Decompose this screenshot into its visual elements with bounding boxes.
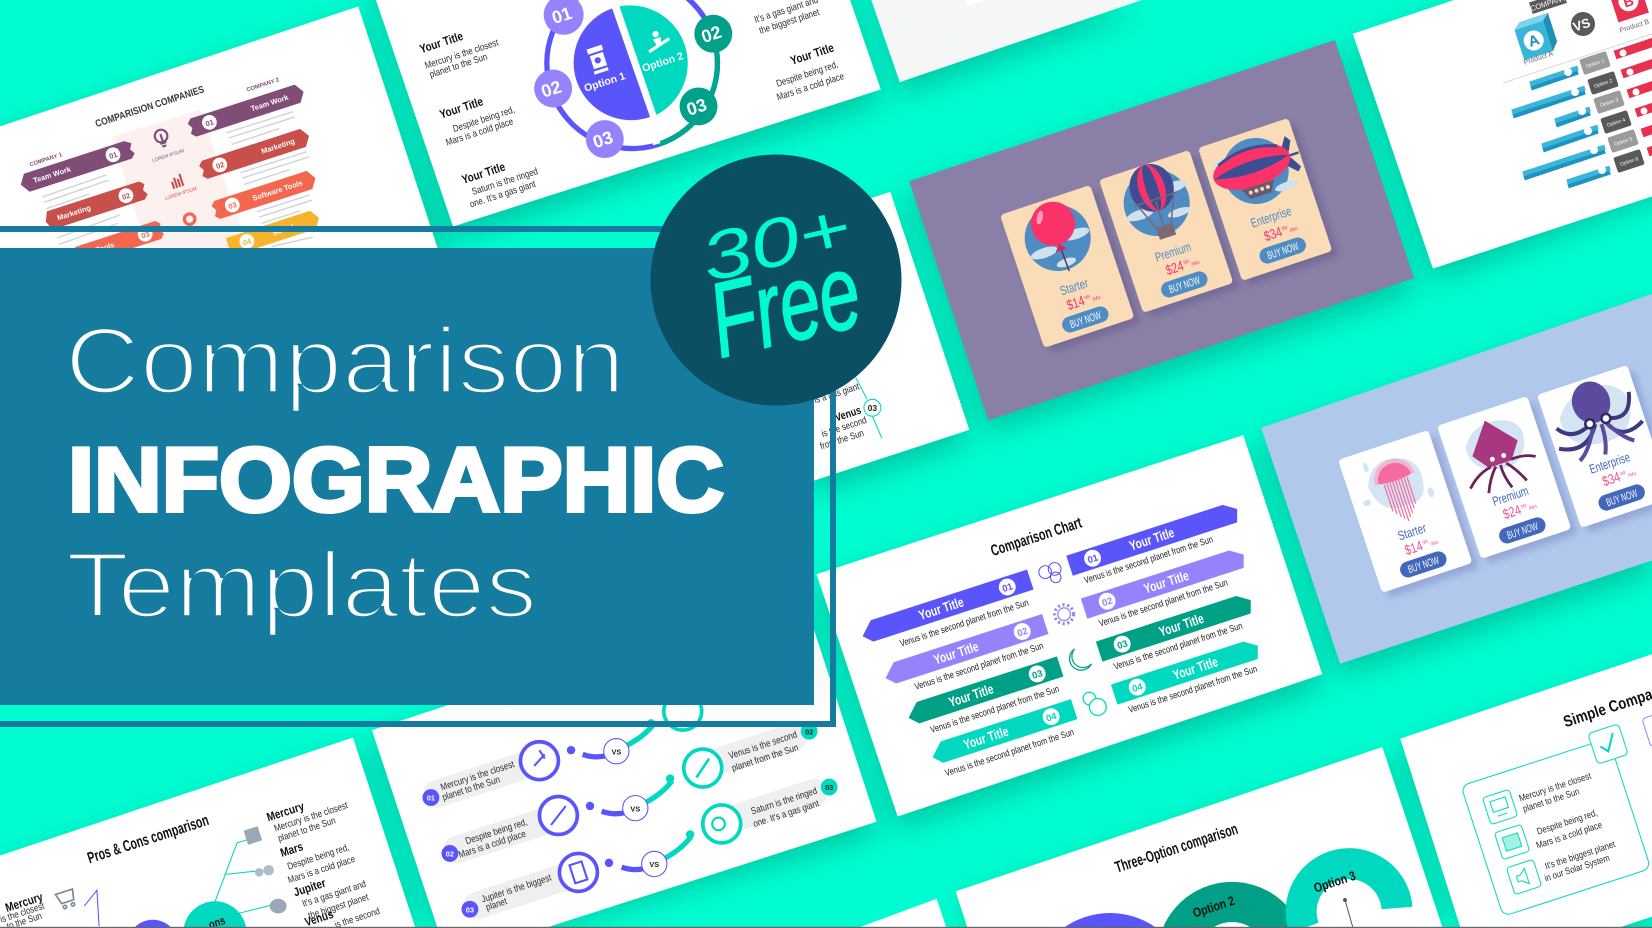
chart: circle diagram: 02 <box>699 22 724 47</box>
icon: sun and cloud <box>1083 692 1106 715</box>
ribbon right 01: Team Work <box>250 92 290 113</box>
row 2: planet from the Sun <box>730 742 800 773</box>
captions: Venus is the second planet from the Sun <box>929 684 1061 736</box>
panel: partly hidden slide: is a gas giant <box>813 380 861 405</box>
card: jellyfish starter: /Mo <box>1430 540 1440 548</box>
panel: pros and cons slide: Mars is a cold place <box>286 853 357 885</box>
ribbon right 01: 01 <box>204 117 215 129</box>
panel: purple pricing slide background <box>909 40 1414 420</box>
option tags: Option 3 <box>1599 97 1619 109</box>
ribbon right 01 <box>186 83 307 138</box>
ribbon left 01: 01 <box>1001 581 1014 595</box>
banner outline <box>0 229 833 724</box>
row 2: Venus is the second <box>727 729 798 761</box>
row 2: Mars is a cold place <box>457 828 527 860</box>
card: hot air balloon premium: $24 <box>1163 257 1186 278</box>
panel: comparison companies slide: LOREM IPSUM <box>164 186 198 202</box>
panel: partly hidden slide: from the Sun <box>819 427 865 452</box>
card: balloon starter: $14 <box>1064 292 1087 313</box>
ribbon right 02 <box>198 127 312 180</box>
card: squid premium: $24 <box>1501 501 1523 522</box>
panel: partly hidden slide: is the second <box>820 414 868 439</box>
ribbon left 02: 02 <box>1016 626 1029 640</box>
card: jellyfish starter: $14 <box>1402 537 1425 558</box>
captions <box>898 534 1259 779</box>
row 3: planet <box>484 895 509 913</box>
panel: blue pricing slide background <box>1261 294 1652 664</box>
panel: two option circle slide: Despite being red, <box>775 59 839 89</box>
panel: two option circle slide: the biggest planet <box>758 6 821 36</box>
panel: partly hidden slide <box>738 192 969 480</box>
ribbon left 02 <box>882 614 1049 686</box>
panel: pros and cons slide: Mars <box>279 840 305 860</box>
row 1: VS <box>611 747 621 756</box>
card: octopus enterprise <box>1537 363 1652 534</box>
option tags: Option 1 <box>1585 58 1605 70</box>
icon: sun <box>1055 605 1074 624</box>
group: simple comparison content: Mercury is the closest <box>1518 770 1593 804</box>
ribbon left 01 <box>859 570 1034 644</box>
card: airship enterprise: 99 <box>1281 225 1288 232</box>
heading: Comparison: Comparison <box>65 308 625 413</box>
banner panel <box>0 248 814 705</box>
chart: three option arches: Three-Option comparison <box>1113 821 1240 877</box>
row 2: 02 <box>446 850 454 859</box>
ribbon right 04: Social <box>271 222 295 237</box>
card: airship enterprise: Enterprise <box>1249 203 1293 231</box>
panel: small bottom slide <box>860 899 946 927</box>
panel: comparison chart slide <box>817 435 1322 817</box>
ribbon right 03: Software Tools <box>251 178 304 203</box>
row 2: 02 <box>805 727 813 736</box>
panel: two option circle slide: planet to the Sun <box>428 51 489 80</box>
ribbon left 02 <box>43 180 149 231</box>
ribbon left 02: 02 <box>121 191 131 202</box>
card: airship enterprise: BUY NOW <box>1266 241 1300 262</box>
panel: two option circle slide: one. It's a gas giant <box>468 178 537 210</box>
option tags: Option 6 <box>1619 156 1639 168</box>
heading: INFOGRAPHIC: INFOGRAPHIC <box>68 430 724 531</box>
panel: comparison companies slide: LOREM IPSUM <box>152 148 185 164</box>
ribbon right 02: Marketing <box>260 136 296 156</box>
option tags <box>1579 51 1645 173</box>
chart: circle diagram: Option 2 <box>641 50 685 75</box>
panel: comparison companies slide: COMPARISION COMPANIES <box>94 84 206 130</box>
frame <box>1461 738 1651 916</box>
icon: picture <box>1494 824 1530 860</box>
ribbon right 01: Your Title <box>1127 525 1176 554</box>
panel: two option circle slide: Your Title <box>438 95 485 122</box>
row 2: VS <box>630 804 640 813</box>
panel: two option circle slide: Your Title <box>418 30 465 56</box>
chart: product B bars <box>1615 40 1652 152</box>
panel: two option circle slide: Mercury is the closest <box>423 37 500 71</box>
ribbon left 02: Marketing <box>56 203 92 222</box>
panel: pros and cons slide: Mercury <box>265 800 307 825</box>
panel: pros and cons slide: Pros & Cons comparison <box>85 812 211 867</box>
icon: drops <box>255 865 274 877</box>
chart: three option arches <box>1063 821 1397 928</box>
panel: top right product comparison slide <box>1353 0 1652 269</box>
ribbon left 02: Your Title <box>932 639 981 668</box>
card: squid premium <box>1437 394 1578 565</box>
row 3: VS <box>649 860 659 869</box>
card: balloon starter: /Mo <box>1092 295 1102 303</box>
ribbon right 02: Your Title <box>1142 568 1191 597</box>
panel: pros and cons slide: Mercury is the closest <box>273 799 350 834</box>
chart: circle diagram: 02 <box>539 77 564 102</box>
chart: three option arches: Option 2 <box>1191 893 1237 921</box>
group: simple comparison content: Despite being red, <box>1535 807 1599 837</box>
group: simple comparison content: in our Solar System <box>1543 852 1611 884</box>
ribbon right 03 <box>210 169 318 220</box>
panel: comparison companies slide <box>0 6 453 316</box>
card: octopus enterprise: $34 <box>1600 468 1622 489</box>
card: jellyfish starter: 99 <box>1422 539 1429 546</box>
panel: two option circle slide: Despite being red, <box>451 104 516 134</box>
chart: product A bars <box>1512 68 1610 186</box>
icon: gear <box>184 214 195 224</box>
group: simple comparison content: planet to the Sun <box>1521 786 1581 814</box>
chart: three option arches: Option 3 <box>1312 868 1358 896</box>
icon: light bulb <box>153 128 170 148</box>
panel: three option slide <box>956 747 1442 927</box>
ribbon right 03: 03 <box>227 200 238 211</box>
card: airship enterprise: $34 <box>1262 223 1284 244</box>
group: top right product comparison content: Product B <box>1619 18 1651 35</box>
badge: 30+ Free <box>650 154 902 406</box>
card: jellyfish starter <box>1338 428 1479 599</box>
panel: pros and cons slide: is the closest <box>0 900 46 925</box>
card: jellyfish starter: BUY NOW <box>1407 554 1441 576</box>
card: octopus enterprise: /Mo <box>1627 471 1637 479</box>
row 1: Mercury is the closest <box>439 758 516 793</box>
row 2: Despite being red, <box>464 816 529 846</box>
icon: database gear <box>270 899 287 913</box>
panel: two option circle slide: Mars is a cold place <box>444 116 515 148</box>
row 1: 01 <box>427 794 435 803</box>
row 1 <box>420 692 702 811</box>
icon: cube A <box>1513 13 1560 60</box>
card: airship enterprise <box>1198 116 1339 287</box>
icon: bar chart <box>170 174 183 189</box>
icon: moon <box>1070 649 1092 670</box>
panel: pros and cons slide: Mercury <box>4 891 45 915</box>
ribbon left 01: Team Work <box>32 164 73 185</box>
panel: two option circle slide: Your Title <box>460 161 507 187</box>
heading: Templates: Templates <box>66 533 537 637</box>
group: simple comparison content: It's the biggest planet <box>1543 838 1617 871</box>
card: hot air balloon premium: Premium <box>1153 239 1193 265</box>
panel: simple comparison slide <box>1400 654 1652 927</box>
ribbon right 04: 04 <box>242 236 253 247</box>
card: balloon starter: BUY NOW <box>1069 309 1103 331</box>
badge: 30+ Free: Free <box>699 232 871 380</box>
row 3: Saturn is the ringed <box>749 785 818 817</box>
panel: comparison chart slide: Comparison Chart <box>989 514 1085 560</box>
chart: circle diagram <box>534 0 732 158</box>
row 3: Jupiter is the biggest <box>480 872 553 905</box>
panel: pros and cons slide: Jupiter <box>292 877 328 900</box>
captions: Venus is the second planet from the Sun <box>1098 577 1229 630</box>
card: airship enterprise: /Mo <box>1289 226 1299 234</box>
captions: Venus is the second planet from the Sun <box>1112 621 1244 673</box>
panel: pill comparison slide <box>372 589 877 927</box>
card: jellyfish starter: Starter <box>1396 520 1429 544</box>
ribbon right 02 <box>1081 547 1248 619</box>
card: hot air balloon premium: BUY NOW <box>1168 274 1202 296</box>
panel: pros and cons slide: planet to the Sun <box>276 815 337 844</box>
card: squid premium: /Mo <box>1528 504 1538 512</box>
group: simple comparison content: Mars is a cold place <box>1535 819 1604 851</box>
card: octopus enterprise: 99 <box>1619 470 1627 478</box>
icon: option 1 machine <box>587 45 610 75</box>
captions: Venus is the second planet from the Sun <box>1127 664 1259 716</box>
ribbon left 03: Tools <box>95 240 116 255</box>
icon: shopping cart <box>55 889 78 910</box>
ribbon left 03: 03 <box>1031 668 1044 682</box>
icon: clouds <box>1039 563 1061 583</box>
ribbon right 04: 04 <box>1131 681 1145 695</box>
ribbon left 04: Your Title <box>962 724 1011 752</box>
row 2 <box>440 720 818 867</box>
icon: device <box>244 826 262 845</box>
captions: Venus is the second planet from the Sun <box>898 597 1030 650</box>
icon: versus badge: VS <box>1571 15 1592 35</box>
icon: cube A: A <box>1526 31 1542 51</box>
ribbon right 04 <box>1111 638 1262 705</box>
ribbon right 02: 02 <box>1101 595 1114 609</box>
captions: Venus is the second planet from the Sun <box>1083 534 1215 586</box>
group: top right product comparison content: Product A <box>1523 50 1554 67</box>
captions: Venus is the second planet from the Sun <box>944 727 1075 779</box>
panel: comparison companies slide: COMPANY 1 <box>29 152 64 168</box>
ribbon left 04: 04 <box>1045 711 1059 725</box>
row 3: 03 <box>825 783 833 792</box>
card: balloon starter: Starter <box>1058 275 1091 299</box>
ribbon left 01: 01 <box>108 150 118 161</box>
card: balloon starter: 99 <box>1084 294 1091 301</box>
card: squid premium: BUY NOW <box>1506 520 1540 542</box>
ribbon right 03: Your Title <box>1157 611 1206 639</box>
option tags: Option 4 <box>1606 117 1626 129</box>
panel: pros and cons slide: the biggest planet <box>307 891 370 921</box>
card: squid premium: Premium <box>1490 483 1530 509</box>
panel: pros and cons slide: Despite being red, <box>286 841 351 872</box>
ribbon right 04: Your Title <box>1171 654 1220 683</box>
icon: check square <box>1588 724 1628 764</box>
ribbon left 03: Your Title <box>947 681 996 710</box>
panel: two option circle slide: Your Title <box>789 42 836 68</box>
panel: partly hidden slide: Venus <box>834 405 863 424</box>
card: octopus enterprise: Enterprise <box>1587 449 1632 477</box>
card: hot air balloon premium: 99 <box>1183 259 1190 266</box>
panel: two option circle slide: Mars is a cold place <box>775 70 845 102</box>
card: balloon starter <box>1000 183 1141 354</box>
icon: cube B <box>1609 0 1649 22</box>
ribbon right 02: 02 <box>215 160 225 171</box>
ribbon right 01 <box>1066 501 1241 576</box>
row 3: one. It's a gas giant <box>752 797 821 829</box>
row 3: 03 <box>466 905 474 914</box>
ribbon left 01: Your Title <box>917 594 966 623</box>
ribbon left 03 <box>905 656 1063 726</box>
ribbon right 03: 03 <box>1116 638 1129 652</box>
panel: pros and cons slide <box>0 738 415 928</box>
chart: circle diagram: 03 <box>590 127 616 152</box>
option tags: Option 5 <box>1613 136 1633 148</box>
card: hot air balloon premium <box>1099 148 1240 319</box>
panel: partly hidden slide: 03 <box>868 403 877 413</box>
icon: monitor <box>1482 789 1518 825</box>
ribbon right 04 <box>226 209 322 256</box>
panel: grey top slide <box>871 0 1142 82</box>
badge: 30+ Free: 30+ <box>694 189 858 297</box>
option tags: Option 2 <box>1593 78 1613 90</box>
panel: comparison companies slide: COMPANY 2 <box>246 77 280 94</box>
ribbon left 03: 03 <box>140 229 151 240</box>
icon: speaker <box>1506 859 1542 895</box>
ribbon left 03 <box>75 220 165 265</box>
captions: Venus is the second planet from the Sun <box>913 641 1045 693</box>
chart: circle diagram: 01 <box>549 3 574 28</box>
panel: pros and cons slide: It's a gas giant and <box>301 878 367 909</box>
panel: two option circle slide: Saturn is the ringed <box>470 165 539 197</box>
card: hot air balloon premium: /Mo <box>1191 260 1201 268</box>
ribbon right 01: 01 <box>1086 553 1100 566</box>
ribbon left 01 <box>18 139 136 194</box>
chart: circle diagram: 03 <box>684 94 709 120</box>
icon: option 2 figure <box>644 28 671 52</box>
card: squid premium: 99 <box>1520 503 1527 510</box>
ribbon left 04 <box>929 699 1077 765</box>
row 3 <box>460 775 838 923</box>
row 1: planet to the Sun <box>441 774 501 803</box>
chart: circle diagram: Option 1 <box>583 70 627 95</box>
panel: two option circle slide <box>369 0 881 227</box>
group: top right product comparison content <box>1503 0 1652 186</box>
ribbon right 03 <box>1096 592 1255 662</box>
group: simple comparison content <box>1461 676 1652 916</box>
